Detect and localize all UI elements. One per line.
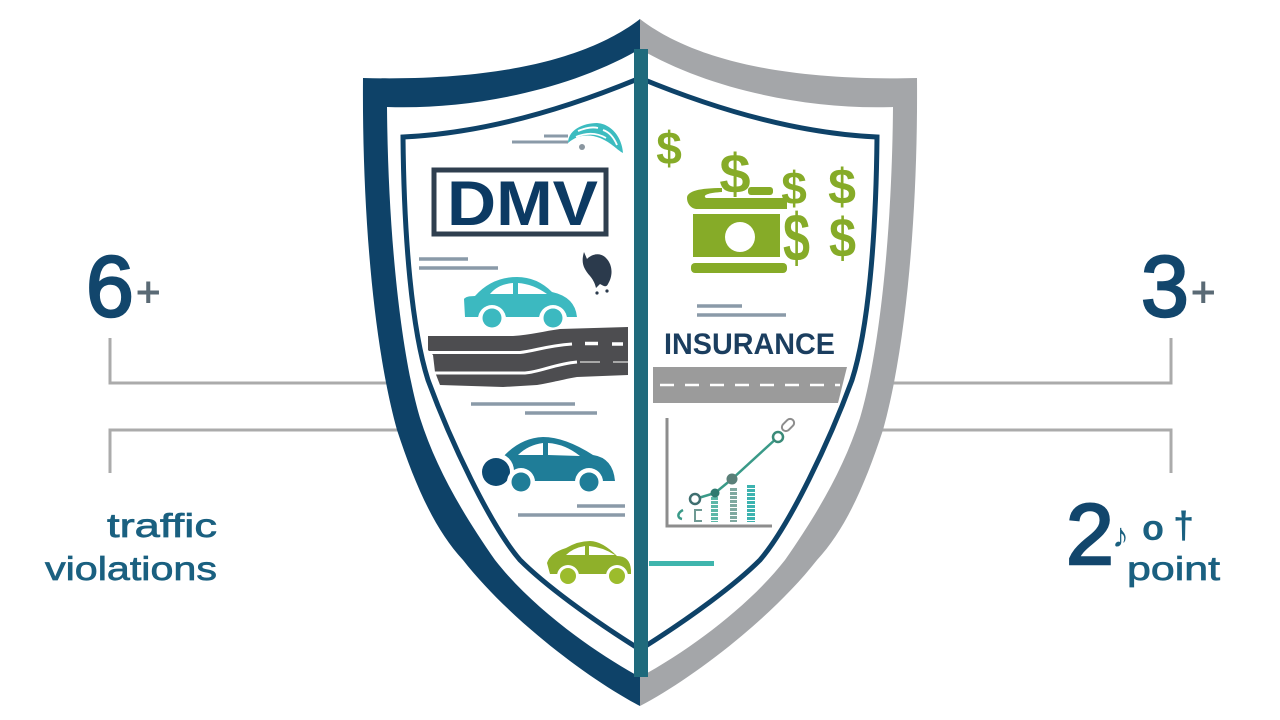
icon: money stack with dollar signs: $	[656, 122, 682, 174]
road: winding	[428, 327, 628, 387]
speed lines	[518, 506, 625, 515]
icon: money stack with dollar signs	[656, 122, 856, 276]
icon: money stack with dollar signs: $	[829, 206, 856, 269]
right half: insurance content	[649, 122, 856, 566]
label: 2 point: point	[1127, 550, 1220, 587]
centre divider	[634, 49, 648, 677]
icon: money stack with dollar signs: $	[783, 200, 810, 276]
label: 2 point	[1066, 487, 1220, 587]
stat: 6+: 6	[86, 239, 134, 335]
speed lines	[697, 306, 786, 315]
label: traffic violations: traffic	[107, 507, 217, 544]
speed lines	[419, 259, 498, 268]
label: 2 point: o	[1142, 507, 1164, 548]
stat: 3+: +	[1191, 268, 1216, 315]
car: dark teal	[478, 437, 615, 496]
label: 2 point: †	[1173, 505, 1194, 547]
label: 2 point: 2	[1066, 487, 1114, 583]
road: straight	[653, 367, 847, 403]
stat: 3+: 3	[1141, 239, 1189, 335]
icon: top teal car dome	[512, 123, 623, 153]
car: light teal	[464, 277, 577, 333]
icon: money stack with dollar signs: $	[781, 162, 807, 214]
icon: money stack with dollar signs: $	[719, 142, 751, 205]
stat: 3+	[1141, 239, 1216, 335]
shield inner outline	[403, 78, 877, 647]
label: traffic violations: violations	[45, 550, 217, 587]
icon: money stack with dollar signs: $	[828, 159, 856, 215]
right connector lines	[880, 338, 1171, 473]
speed lines	[471, 404, 597, 413]
shield outer band: navy left	[363, 19, 640, 706]
left connector lines	[110, 338, 400, 473]
stat: 6+	[86, 239, 161, 335]
car: green	[547, 541, 631, 587]
teal bar	[649, 561, 714, 566]
icon: dark blob	[583, 252, 612, 295]
label: 2 point: ♪	[1112, 517, 1129, 555]
shield	[363, 19, 917, 706]
left half: DMV content	[419, 123, 631, 587]
INSURANCE heading: INSURANCE	[664, 328, 835, 361]
stat: 6+: +	[136, 268, 161, 315]
label: traffic violations	[45, 507, 217, 587]
DMV sign: DMV	[447, 169, 598, 239]
line and bar chart	[667, 417, 796, 526]
shield outer band: grey right	[640, 19, 917, 706]
